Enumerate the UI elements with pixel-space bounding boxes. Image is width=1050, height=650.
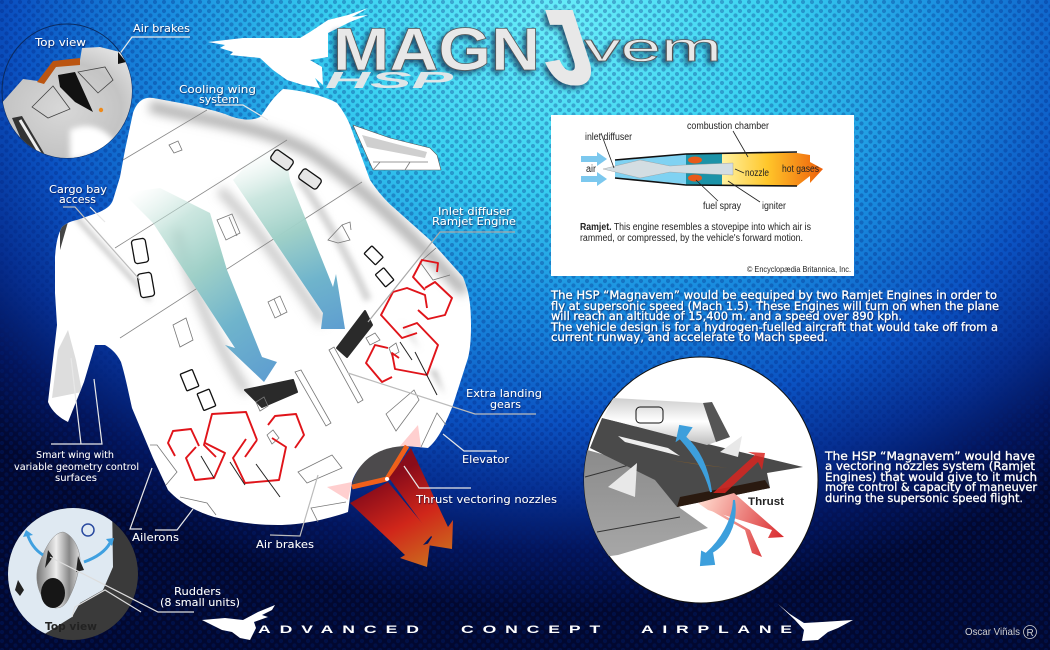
panel lines <box>115 110 362 338</box>
cooling airflow arrow: left <box>123 188 277 382</box>
footer tagline <box>258 624 792 636</box>
text block: ramjet description: fly at supersonic speed (Mach 1.5). These Engines will turn on when the plane <box>551 299 999 313</box>
label: thrust: Thrust <box>748 496 784 508</box>
red thrust beams <box>698 493 784 538</box>
ramjet labels: combustion chamber <box>687 121 770 132</box>
ramjet inlet red outlines: right cluster <box>366 260 452 382</box>
thrust arrow 1 <box>350 482 432 567</box>
nacelle <box>603 398 730 445</box>
aircraft labels: variable geometry control <box>14 462 139 473</box>
thin surface panels <box>150 141 450 522</box>
aircraft labels: (8 small units) <box>160 597 240 609</box>
text block: ramjet description: The vehicle design is for a hydrogen-fuelled aircraft that would take off from a <box>550 320 998 334</box>
aircraft labels: surfaces <box>55 473 97 484</box>
aircraft labels: Cargo bay <box>49 184 107 196</box>
aircraft labels: Cooling wing <box>179 84 256 96</box>
credit: Oscar Viñals <box>965 626 1020 638</box>
aircraft labels: Smart wing with <box>36 450 114 461</box>
ramjet caption: © Encyclopædia Britannica, Inc. <box>747 265 851 274</box>
ramjet labels: nozzle <box>745 168 769 179</box>
ramjet labels: hot gases <box>782 164 819 175</box>
bottom right eagle <box>778 604 853 641</box>
ramjet inlet red outlines: left cluster <box>168 412 304 483</box>
aircraft labels: system <box>199 94 239 106</box>
text block: vectoring description: more control & capacity of maneuver <box>825 480 1037 494</box>
text block: ramjet description: The HSP “Magnavem” would be eequiped by two Ramjet Engines in order to <box>550 288 997 302</box>
aircraft labels: access <box>59 194 96 206</box>
title logo: vem <box>584 26 722 70</box>
thrust vectoring nozzle sector <box>327 425 421 500</box>
text block: vectoring description: Engines) that would give to it much <box>825 470 1037 484</box>
title logo: MAGN <box>333 16 540 83</box>
black intake left <box>245 380 297 407</box>
inset: rear view rudders <box>8 508 138 640</box>
text block: ramjet description: will reach an altitude of 15,400 m. and a speed over 890 kph. <box>551 309 902 323</box>
panel: ramjet diagram <box>551 115 854 276</box>
footer tagline: CONCEPT <box>461 624 600 636</box>
black intake right <box>337 311 372 357</box>
inlet detail strokes <box>201 342 437 497</box>
cooling airflow arrow: right <box>233 145 345 329</box>
ramjet caption: Ramjet. This engine resembles a stovepipe into which air is <box>580 222 811 233</box>
aircraft labels: Elevator <box>462 454 510 466</box>
ramjet labels: fuel spray <box>703 201 741 212</box>
ramjet caption <box>580 222 851 274</box>
aircraft labels: Top view <box>34 37 86 49</box>
aircraft labels: Ailerons <box>132 532 179 544</box>
aircraft labels: Inlet diffuser <box>438 206 512 218</box>
blue arrows <box>677 426 711 492</box>
text block: vectoring description: during the supersonic speed flight. <box>825 491 1023 505</box>
access hatches <box>131 149 394 411</box>
aircraft labels: Thrust vectoring nozzles <box>415 494 557 506</box>
text block: ramjet description <box>550 288 999 344</box>
bottom left eagle <box>202 605 275 640</box>
text block: ramjet description: current runway, and accelerate to Mach speed. <box>551 330 828 344</box>
callout lines <box>51 37 536 536</box>
dark fuselage deck <box>590 418 803 507</box>
ramjet caption: rammed, or compressed, by the vehicle's forward motion. <box>580 233 803 244</box>
aircraft body top view <box>48 89 471 525</box>
credit: R <box>1026 628 1034 639</box>
text block: vectoring description <box>824 449 1037 505</box>
panel: vectoring nozzle circle <box>580 357 818 603</box>
lower wing <box>580 448 708 560</box>
title logo <box>333 0 722 106</box>
aircraft labels: Air brakes <box>133 23 190 35</box>
thrust arrow 2 <box>389 448 453 549</box>
inset: top view air brakes <box>0 24 140 160</box>
inset caption: top view: Top view <box>45 621 97 633</box>
white fins <box>608 436 742 497</box>
footer tagline: AIRPLANE <box>641 624 792 636</box>
right tail fin <box>353 125 441 170</box>
rudder callout lines <box>50 557 194 617</box>
aircraft labels: Rudders <box>174 586 221 598</box>
subtitle HSP: HSP <box>325 67 455 93</box>
footer tagline: ADVANCED <box>258 624 419 636</box>
aircraft labels: gears <box>490 399 521 411</box>
ramjet labels: igniter <box>762 201 787 212</box>
aircraft labels: Ramjet Engine <box>432 216 516 228</box>
aircraft labels <box>14 23 557 609</box>
ramjet labels <box>585 121 819 212</box>
ramjet engine drawing <box>581 131 823 202</box>
text block: vectoring description: a vectoring nozzles system (Ramjet <box>825 459 1035 473</box>
ramjet labels: inlet diffuser <box>585 132 633 143</box>
ramjet labels: air <box>586 164 597 175</box>
soft surface shading <box>52 106 465 398</box>
aircraft labels: Extra landing <box>466 388 542 400</box>
aircraft labels: Air brakes <box>256 539 314 551</box>
text block: vectoring description: The HSP “Magnavem” would have <box>824 449 1035 463</box>
title eagle silhouette <box>208 8 368 88</box>
